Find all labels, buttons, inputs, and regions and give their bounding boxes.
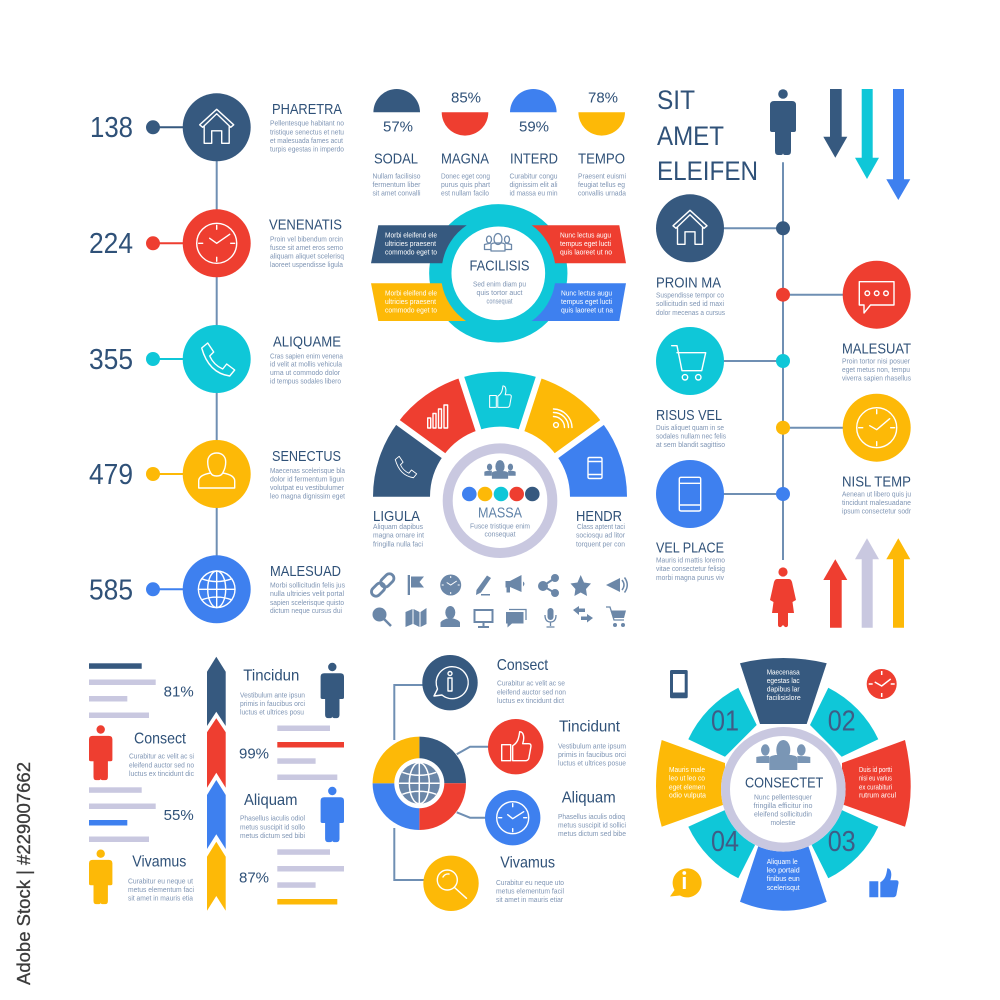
branch consect	[422, 655, 566, 710]
ribbon navy: Morbi eleifend ele	[385, 232, 437, 239]
node blue: morbi magna purus viv	[656, 575, 724, 582]
arrow up yellow	[886, 538, 910, 628]
magna 85%	[441, 90, 490, 198]
icon: info bubble	[670, 868, 702, 897]
node navy	[656, 194, 790, 317]
ligula label: Aliquam dapibus	[373, 524, 423, 531]
ribbon blue: tempus eget lucti	[561, 299, 612, 306]
tempo 78%: feugiat tellus eg	[578, 182, 625, 189]
sodal 57%: fermentum liber	[372, 182, 421, 189]
segment navy: facilisislore	[767, 695, 801, 702]
segment yellow: Mauris male	[669, 767, 705, 774]
facilisis text: quis tortor auct	[476, 290, 523, 297]
vivamus person: metus elementum faci	[128, 887, 194, 894]
branch aliquam: Phasellus iaculis odioq	[558, 814, 625, 821]
step 224 venenatis: 224	[89, 228, 133, 260]
aliquam person: metus dictum sed bibi	[240, 833, 305, 840]
branch tincidunt: luctus et ultrices posue	[558, 760, 626, 768]
massa ring	[448, 448, 552, 553]
step 224 venenatis: VENENATIS	[269, 217, 342, 234]
step 585 malesuad: sapien scelerisque quisto	[270, 600, 344, 607]
segment yellow: leo ut leo co	[669, 776, 705, 783]
aliquam person: Phasellus iaculis odiol	[240, 816, 305, 823]
step 355 aliquame: id tempus sodales libero	[270, 378, 341, 386]
branch aliquam: metus suscipit id sollici	[558, 823, 626, 830]
tempo 78%: TEMPO	[578, 150, 625, 167]
massa text	[470, 523, 530, 539]
icon: megaphone	[506, 575, 524, 592]
ligula label: magna ornare int	[373, 533, 424, 540]
segment blue: scelerisqut	[767, 885, 800, 892]
step 138 pharetra: 138	[90, 112, 133, 144]
tincidun person: Tincidun	[243, 668, 299, 685]
branch aliquam: Aliquam	[562, 790, 616, 807]
icon: clock	[440, 574, 461, 596]
segment 01: 01	[711, 706, 739, 738]
ribbon red: tempus eget lucti	[560, 241, 611, 248]
step 355 aliquame: ALIQUAME	[273, 334, 341, 351]
node blue: Mauris id mattis loremo	[656, 558, 725, 565]
segment navy	[740, 658, 827, 724]
hendr label: torquent per con	[576, 542, 625, 549]
segment yellow: eget elemen	[669, 784, 705, 791]
icon: share	[538, 574, 558, 596]
bars 87%	[239, 849, 344, 904]
facilisis text: Sed enim diam pu	[473, 282, 526, 289]
icon: monitor	[474, 610, 492, 627]
node cyan	[656, 327, 790, 449]
aliquam person	[240, 787, 344, 842]
segment 01	[688, 688, 757, 757]
tincidun person: luctus et ultrices posu	[240, 710, 304, 717]
step 355 aliquame: id velit at mollis vehicula	[270, 362, 342, 369]
hendr label: HENDR	[576, 508, 622, 525]
ribbon yellow	[371, 283, 466, 321]
segment navy: egestas lac	[767, 678, 800, 685]
consect person: Consect	[134, 730, 186, 747]
step 479 senectus: volutpat eu vestibulumer	[270, 485, 345, 492]
branch tincidunt: primis in faucibus orci	[558, 752, 626, 759]
consect person: eleifend auctor sed no	[129, 762, 194, 769]
icon: link	[370, 572, 396, 598]
chevron column	[207, 657, 226, 911]
node yellow: Aenean ut libero quis ju	[842, 492, 911, 499]
step 138 pharetra: PHARETRA	[272, 101, 342, 118]
step 355 aliquame: 355	[89, 344, 133, 376]
icon: people filled	[484, 460, 516, 479]
icon: speaker	[606, 578, 627, 592]
step 479 senectus: SENECTUS	[272, 448, 341, 465]
interd 59%: INTERD	[510, 150, 558, 167]
vivamus person: Curabitur eu neque ut	[128, 878, 193, 885]
segment red: Duis id portti	[859, 767, 892, 774]
step 224 venenatis: laoreet uspendisse ligula	[270, 262, 343, 269]
node red: Proin tortor nisi posuer	[842, 358, 911, 365]
hendr label	[576, 508, 626, 549]
icon: red clock	[867, 669, 897, 699]
node blue: VEL PLACE	[656, 539, 724, 556]
hendr label: sociosqu ad litor	[576, 533, 626, 540]
step 138 pharetra: tristique senectus et netu	[270, 129, 344, 136]
icon: flag	[408, 575, 424, 595]
ribbon red	[532, 225, 626, 263]
node cyan: at sem blandit sagittiso	[656, 442, 725, 449]
ribbon blue: Nunc lectus augu	[561, 290, 612, 297]
facilisis text	[473, 282, 526, 306]
sodal 57%: 57%	[383, 119, 413, 136]
icon: transfer arrows	[573, 606, 593, 622]
branch tincidunt	[488, 719, 626, 774]
title: AMET	[657, 121, 724, 151]
centre hub: CONSECTET	[745, 774, 823, 791]
step 585 malesuad: nulla ultricies velit portal	[270, 591, 344, 598]
tempo 78%: 78%	[588, 90, 618, 107]
arrow up red	[823, 559, 847, 628]
segment yellow: odio vulputa	[669, 793, 706, 800]
tincidun person: Vestibulum ante ipsun	[240, 692, 305, 699]
panel: massa semicircle	[373, 368, 627, 553]
segment: mobile blue	[557, 423, 627, 497]
node red: viverra sapien rhasellus	[842, 376, 911, 382]
icon: star	[570, 575, 591, 596]
magna 85%: Donec eget cong	[441, 174, 490, 181]
segment 03	[810, 810, 878, 878]
tempo 78%: Praesent euismi	[578, 174, 626, 181]
massa text: consequat	[484, 532, 516, 539]
node navy: Suspendisse tempor co	[656, 292, 724, 299]
segment 04: 04	[711, 826, 739, 858]
stock id caption: Adobe Stock | #229007662	[14, 762, 34, 985]
node navy: dolor mecenas a cursus	[656, 310, 725, 317]
icon: man	[770, 89, 796, 155]
arrow up lavender	[855, 538, 879, 628]
node navy: sollicitudin sed id maxi	[656, 301, 724, 308]
tincidun person	[240, 663, 344, 718]
donut chart	[373, 737, 466, 830]
panel: consectet radial wheel	[656, 658, 911, 911]
branch vivamus: Curabitur eu neque uto	[496, 880, 564, 887]
node blue	[656, 460, 790, 582]
segment: bars red	[397, 378, 478, 456]
node yellow: NISL TEMP	[842, 474, 911, 491]
node red: eget metus non, tempu	[842, 367, 910, 374]
step 479 senectus: leo magna dignissim eget	[270, 494, 345, 500]
branch aliquam	[485, 790, 626, 845]
panel: icon set	[370, 572, 627, 628]
icon: chat	[506, 610, 526, 628]
branch vivamus: Vivamus	[500, 855, 555, 872]
bars 87%: 87%	[239, 869, 269, 886]
panel: numbered vertical timeline	[89, 93, 345, 623]
ribbon blue	[532, 283, 626, 321]
step 138 pharetra: Pellentesque habitant no	[270, 121, 344, 128]
ribbon red: Nunc lectus augu	[560, 232, 611, 239]
step 224 venenatis: Proin vel bibendum orcin	[270, 237, 343, 244]
panel: sit amet eleifen connected timeline	[656, 85, 912, 628]
node red	[776, 261, 911, 382]
step 355 aliquame: urna ut commodo dolor	[270, 370, 341, 377]
step 479 senectus	[89, 440, 345, 508]
ribbon yellow: Morbi eleifend ele	[385, 290, 437, 297]
facilisis heading: FACILISIS	[470, 257, 530, 274]
ribbon navy	[371, 225, 467, 263]
title: ELEIFEN	[657, 156, 758, 186]
segment blue	[740, 841, 827, 911]
node cyan: sodales nullam nec felis	[656, 434, 726, 440]
step 585 malesuad: Morbi sollicitudin felis jus	[270, 583, 345, 590]
magna 85%: 85%	[451, 90, 481, 107]
vivamus person: Vivamus	[132, 854, 186, 871]
branch vivamus	[423, 855, 564, 911]
interd 59%: dignissim elit ali	[510, 182, 558, 189]
centre hub	[721, 727, 846, 852]
node cyan: RISUS VEL	[656, 407, 722, 424]
panel: globe donut with branches	[373, 655, 626, 911]
ribbon navy: ultricies praesent	[385, 241, 436, 248]
arrow down blue	[886, 89, 910, 200]
branch vivamus: sit amet in mauris etiar	[496, 897, 564, 904]
tincidun person: primis in faucibus orci	[240, 701, 305, 708]
centre hub: molestie	[770, 820, 796, 827]
sodal 57%: sit amet convalli	[372, 191, 421, 198]
step 479 senectus: dolor id fermentum ligun	[270, 476, 344, 484]
icon: thumb up	[869, 868, 899, 897]
title: SIT	[657, 85, 695, 115]
node cyan: Duis aliquet quam in se	[656, 425, 724, 432]
segment red	[842, 740, 911, 827]
ribbon yellow: ultricies praesent	[385, 299, 436, 306]
step 479 senectus: 479	[89, 459, 133, 491]
node navy: PROIN MA	[656, 274, 721, 291]
node yellow: tincidunt malesuadane	[842, 500, 911, 507]
icon: pencil	[476, 576, 491, 596]
icon: phone	[670, 670, 688, 698]
segment 03: 03	[828, 826, 856, 858]
interd 59%: 59%	[519, 119, 549, 136]
branch vivamus: metus elementum facil	[496, 889, 564, 896]
node yellow	[776, 394, 912, 516]
sodal 57%	[372, 89, 421, 198]
consect person: luctus ex tincidunt dic	[129, 771, 194, 778]
segment red: ex curabituri	[859, 784, 892, 791]
ligula label: fringilla nulla faci	[373, 542, 423, 549]
magna 85%: MAGNA	[441, 150, 489, 167]
centre hub: eleifend sollicitudin	[754, 812, 812, 819]
segment: phone navy	[373, 423, 443, 497]
step 138 pharetra: turpis egestas in imperdo	[270, 146, 344, 154]
massa heading: MASSA	[478, 505, 522, 522]
node blue: vitae consectetur felisig	[656, 566, 725, 573]
icon: magnifier	[373, 608, 391, 626]
step 355 aliquame	[89, 325, 343, 393]
icon: map	[406, 608, 426, 627]
vivamus person	[89, 850, 194, 904]
aliquam person: Aliquam	[244, 792, 298, 809]
segment: thumb cyan	[461, 372, 539, 430]
step 355 aliquame: Cras sapien enim venena	[270, 353, 343, 360]
tempo 78%	[578, 90, 626, 198]
step 479 senectus: Maecenas scelerisque bla	[270, 468, 345, 475]
step 224 venenatis: fusce sit amet eros semo	[270, 245, 343, 252]
consect person: Curabitur ac velit ac si	[129, 754, 194, 761]
icon: cart	[606, 607, 626, 627]
node yellow: ipsum consectetur sodr	[842, 508, 912, 516]
interd 59%: id massa eu min	[510, 191, 558, 198]
ribbon yellow: commodo eget to	[385, 308, 437, 315]
bars 55%	[89, 787, 194, 842]
title	[657, 85, 758, 186]
branch consect: Consect	[497, 657, 549, 674]
bars 99%	[239, 726, 344, 780]
branch tincidunt: Vestibulum ante ipsum	[558, 743, 626, 750]
segment red: nisi eu varius	[859, 776, 892, 783]
segment blue: leo portaid	[767, 868, 800, 875]
panel: facilisis ring with ribbons	[371, 215, 626, 331]
icon: people outline	[484, 234, 512, 251]
centre hub: Nunc pellentesquer	[754, 794, 813, 801]
branch aliquam: metus dictum sed bibe	[558, 831, 626, 838]
bars 99%: 99%	[239, 745, 269, 762]
icon: microphone	[545, 608, 556, 627]
vivamus person: sit amet in mauris etia	[128, 895, 193, 902]
icon: user	[440, 606, 460, 627]
step 224 venenatis	[89, 209, 344, 277]
tempo 78%: convallis urnada	[578, 191, 626, 198]
panel: half-circle percentages	[372, 89, 626, 198]
branch consect: eleifend auctor sed non	[497, 689, 566, 696]
sodal 57%: Nullam facilisiso	[372, 174, 421, 181]
magna 85%: purus quis phart	[441, 182, 490, 189]
colour dots	[462, 487, 540, 501]
step 138 pharetra: et malesuada fames acut	[270, 138, 343, 145]
bars 55%: 55%	[164, 807, 194, 824]
segment 04	[688, 810, 757, 878]
step 224 venenatis: aliquam aliquet scelerisq	[270, 254, 344, 261]
centre hub: fringilla efficitur ino	[754, 803, 813, 810]
consect person	[89, 725, 194, 780]
ribbon blue: quis laoreet ut na	[561, 308, 613, 315]
segment navy: dapibus lar	[767, 687, 800, 694]
sodal 57%: SODAL	[374, 150, 418, 167]
magna 85%: est nullam facilo	[441, 191, 489, 198]
ligula label: LIGULA	[373, 508, 420, 525]
segment yellow	[656, 740, 725, 827]
ribbon red: quis laoreet ut no	[560, 250, 612, 256]
step 585 malesuad	[89, 555, 345, 623]
segment blue: Aliquam le	[767, 859, 798, 866]
ribbon navy: commodo eget to	[385, 250, 437, 256]
hendr label: Class aptent taci	[577, 524, 625, 531]
step 585 malesuad: 585	[89, 574, 133, 606]
segment blue: finibus eun	[767, 876, 800, 883]
branch consect: luctus ex tincidunt dict	[497, 698, 564, 705]
panel: bars, people and chevron column	[89, 657, 344, 911]
icon: woman	[770, 567, 796, 627]
arrow down cyan	[855, 89, 879, 179]
segment red: rutrum arcul	[859, 793, 896, 800]
interd 59%: Curabitur congu	[510, 174, 558, 181]
branch consect: Curabitur ac velit ac se	[497, 681, 565, 688]
step 585 malesuad: MALESUAD	[270, 563, 341, 580]
node red: MALESUAT	[842, 340, 911, 357]
ligula label	[373, 508, 424, 549]
branch tincidunt: Tincidunt	[559, 719, 621, 736]
bars 81%	[89, 663, 194, 718]
step 138 pharetra	[90, 93, 344, 161]
segment 02: 02	[828, 706, 856, 738]
step 585 malesuad: dictum neque cursus dui	[270, 608, 342, 615]
interd 59%	[510, 89, 558, 198]
segment navy: Maecenasa	[767, 670, 800, 677]
segment 02	[810, 688, 878, 757]
facilisis text: consequat	[486, 298, 513, 306]
segment: wifi yellow	[522, 378, 603, 456]
aliquam person: metus suscipit id sollo	[240, 824, 305, 831]
bars 81%: 81%	[164, 684, 194, 701]
arrow down navy	[823, 89, 847, 158]
massa text: Fusce tristique enim	[470, 523, 530, 530]
